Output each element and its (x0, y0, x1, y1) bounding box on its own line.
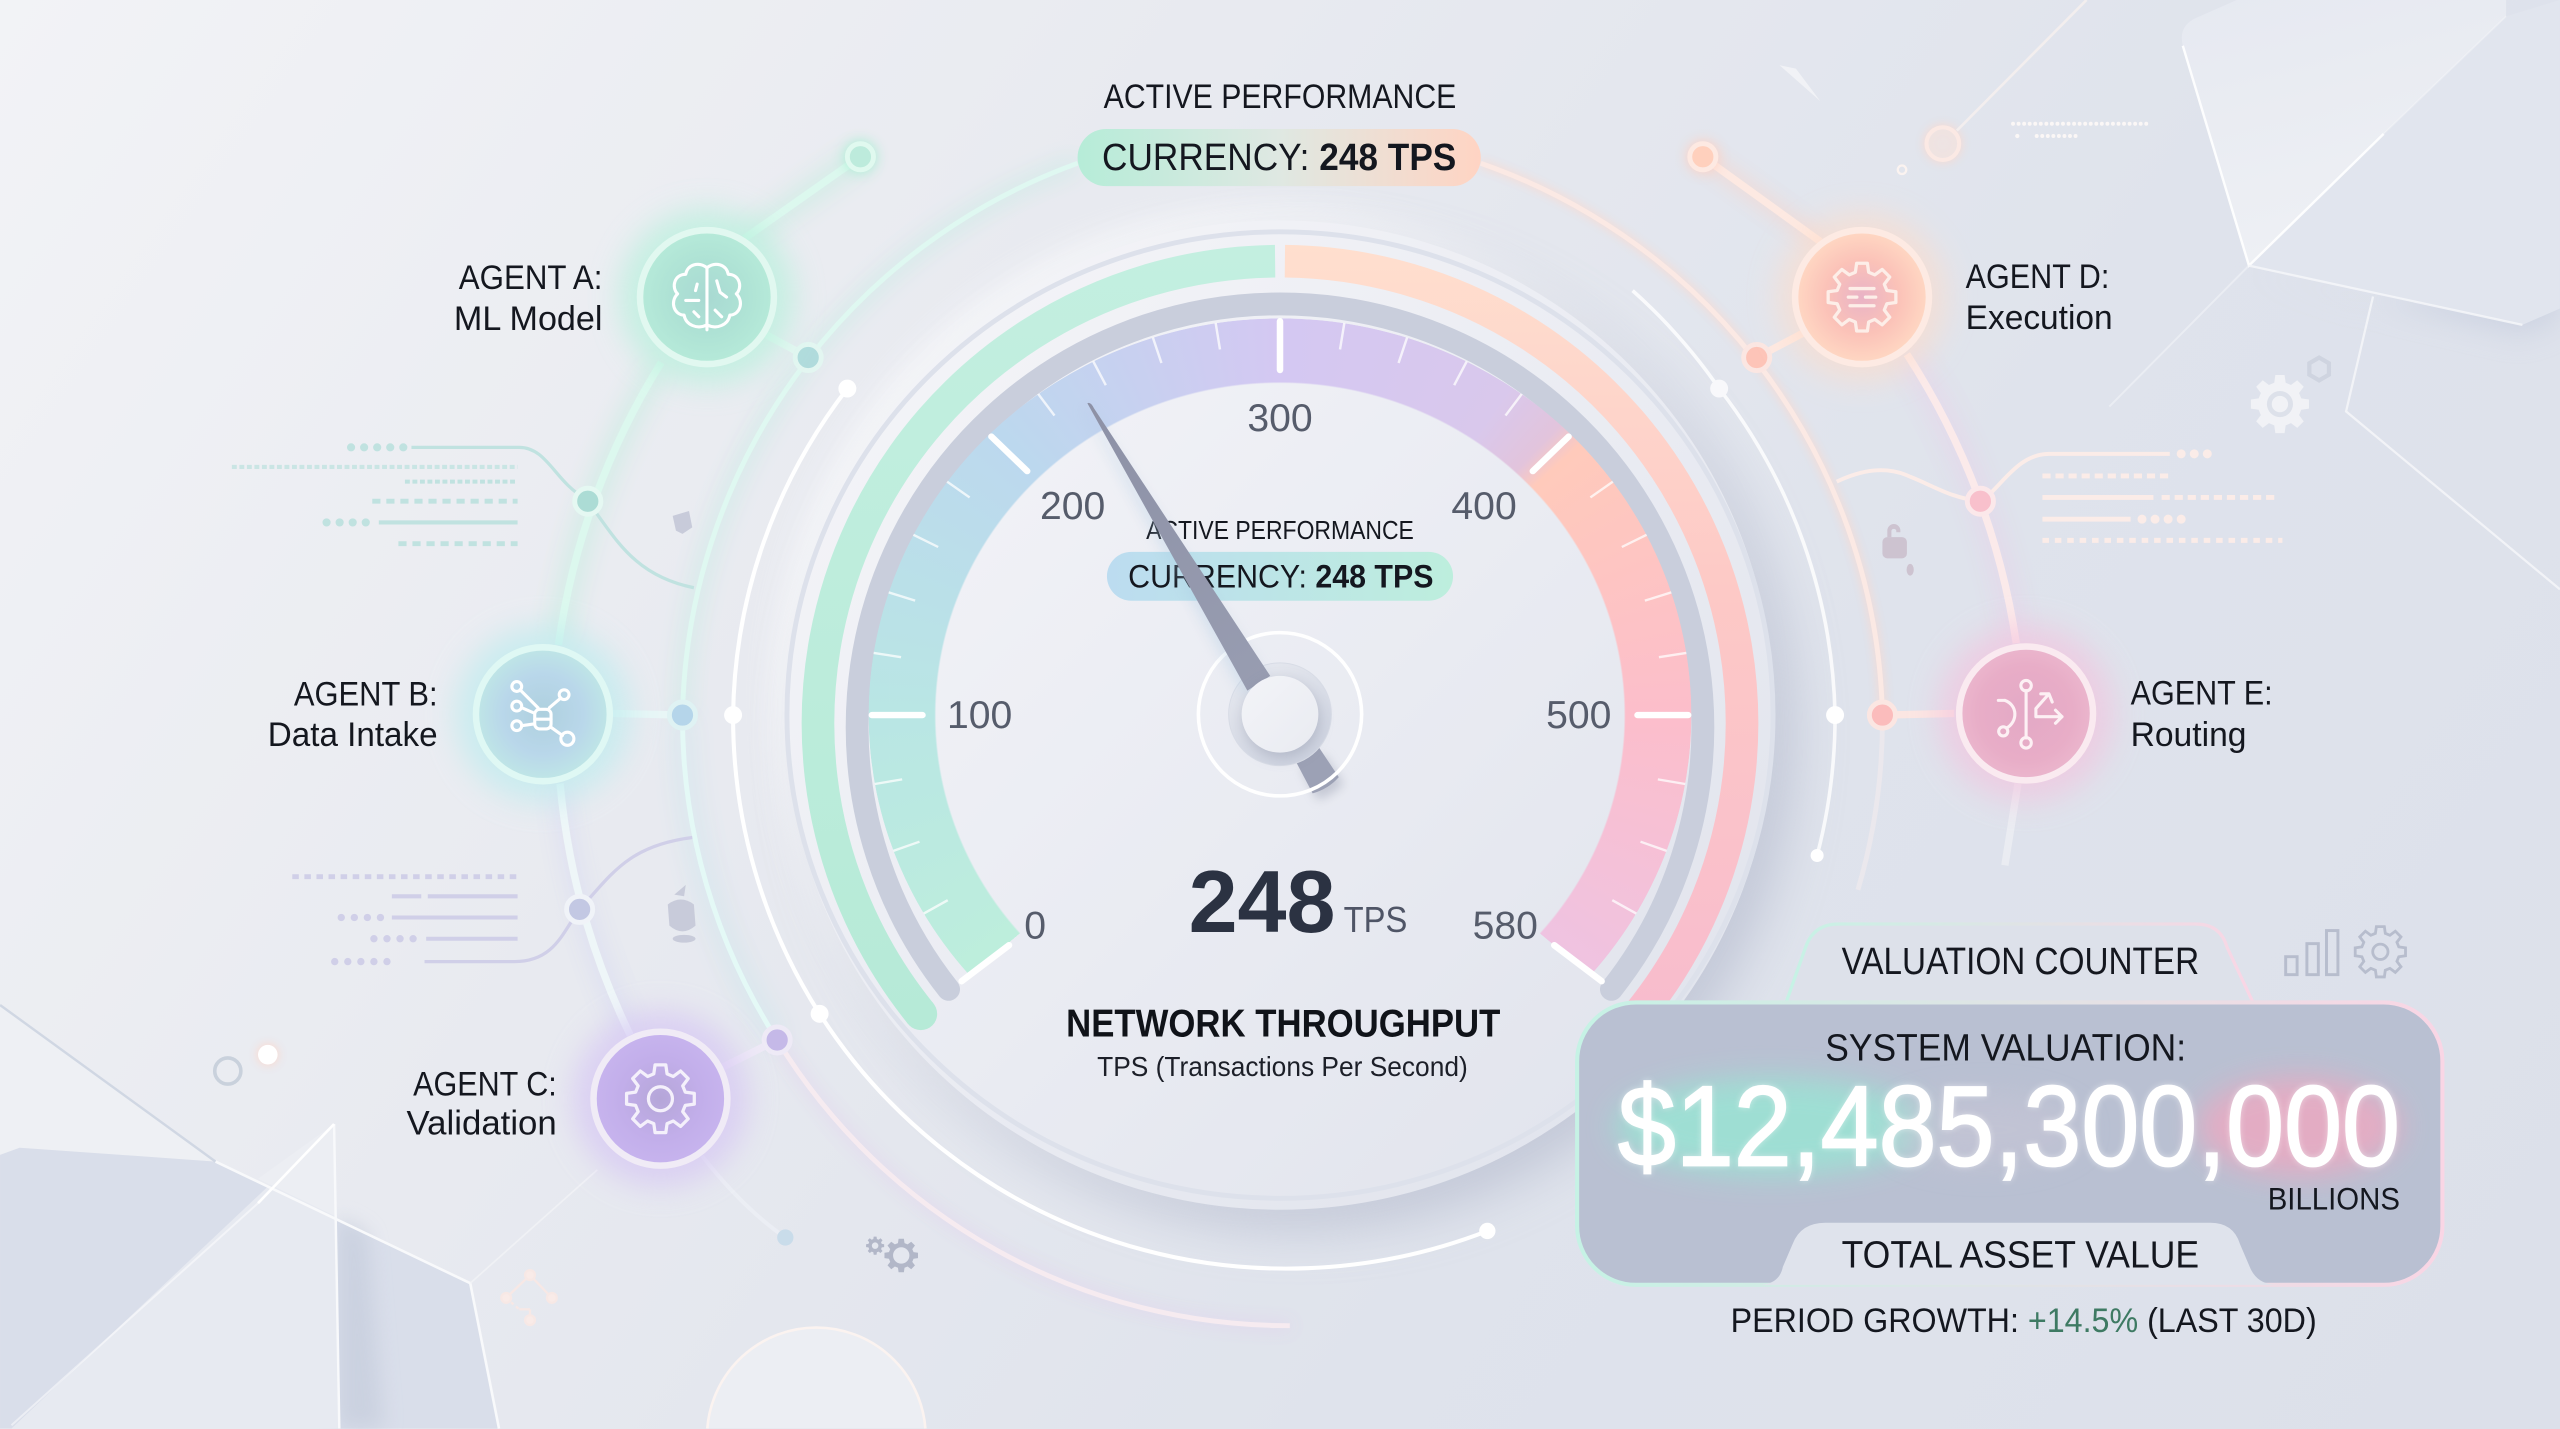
top performance label: ACTIVE PERFORMANCE (1104, 78, 1456, 116)
needle blade (1087, 403, 1270, 691)
agent E node (1938, 625, 2114, 802)
agent E label (2131, 674, 2273, 754)
inner currency pill: CURRENCY: 248 TPS (1128, 558, 1433, 595)
icon: small gears (866, 1237, 918, 1272)
hub knob (1242, 676, 1318, 753)
hub base (1229, 663, 1331, 766)
agent B node (455, 626, 631, 802)
period growth: PERIOD GROWTH: +14.5% (LAST 30D) (1731, 1302, 2317, 1340)
inner currency pill (1107, 552, 1453, 601)
icon: routing (1998, 680, 2062, 748)
big gauge disc (774, 209, 1793, 1228)
agent C label: Validation (407, 1105, 557, 1143)
outer peach-pink status arc (1285, 261, 1742, 1014)
background geometric shards bottom left (0, 1005, 597, 1429)
agent B label: AGENT B: (294, 675, 438, 713)
agent E label: Routing (2131, 716, 2246, 754)
grey inner track (857, 304, 1703, 989)
gauge subtitle: TPS (Transactions Per Second) (1097, 1051, 1468, 1082)
valuation panel (1577, 1002, 2442, 1285)
icon: execution gear (1828, 263, 1896, 331)
valuation tab (1786, 924, 2253, 1002)
valuation panel: $12,485,300,000 (1618, 1064, 2400, 1191)
faint floating shapes (668, 511, 696, 943)
total asset value tab: TOTAL ASSET VALUE (1842, 1234, 2199, 1276)
value glow (1615, 1078, 2400, 1175)
gauge scale labels: 500 (1546, 694, 1611, 737)
top currency pill (1078, 129, 1481, 186)
background geometric shards top right (1780, 0, 2560, 589)
throughput readout (1189, 852, 1407, 951)
decorative circle bottom (707, 1328, 925, 1429)
agent C label: AGENT C: (413, 1065, 557, 1103)
throughput readout: 248 (1189, 852, 1336, 951)
gauge scale labels: 200 (1040, 485, 1105, 528)
icon: white gear top right (2251, 358, 2329, 433)
gauge hub and needle (1087, 403, 1362, 796)
outer green status arc (818, 261, 1275, 1030)
agent B label (268, 675, 438, 754)
gauge end ticks (962, 945, 1602, 981)
icon: network faint (501, 1270, 557, 1325)
icon: data network (512, 682, 574, 745)
agent E label: AGENT E: (2131, 674, 2273, 712)
circuit traces left top (232, 447, 694, 588)
agent A node (619, 209, 795, 385)
valuation panel: BILLIONS (2268, 1182, 2400, 1217)
circuit traces left bottom (292, 838, 692, 962)
circuit traces right (1837, 454, 2282, 540)
decor top right (1898, 0, 2152, 174)
agent A label: ML Model (454, 300, 602, 338)
valuation tab: VALUATION COUNTER (1842, 940, 2199, 982)
gauge title: NETWORK THROUGHPUT (1066, 1003, 1500, 1046)
inner performance label: ACTIVE PERFORMANCE (1146, 515, 1414, 545)
gauge scale labels: 300 (1247, 397, 1313, 440)
total asset value tab (1762, 1223, 2274, 1285)
gauge ticks (872, 321, 1688, 914)
agent A label: AGENT A: (459, 259, 602, 297)
agent D label: Execution (1966, 299, 2113, 337)
agent D label: AGENT D: (1966, 258, 2109, 296)
agent C label (407, 1065, 557, 1143)
icon: lock (1882, 524, 1914, 576)
agent C node (572, 1011, 749, 1187)
gauge scale labels: 400 (1451, 485, 1517, 528)
gauge colour scale band (868, 318, 1692, 973)
gauge scale labels: 100 (947, 694, 1012, 737)
icon: gear (627, 1065, 694, 1133)
icon: bars and gear (2286, 927, 2406, 977)
agent D node (1777, 212, 1947, 382)
agent backbone curves (558, 157, 2018, 1237)
top currency pill: CURRENCY: 248 TPS (1102, 136, 1456, 178)
icon: brain (673, 264, 740, 330)
outer white orbit ring (724, 291, 1844, 1269)
agent A label (454, 259, 602, 338)
gauge scale labels: 0 (1024, 905, 1046, 948)
connector nodes (567, 144, 1993, 1246)
valuation panel: SYSTEM VALUATION: (1825, 1026, 2186, 1068)
agent D label (1966, 258, 2113, 337)
needle tail (1296, 748, 1339, 793)
gauge scale labels: 580 (1473, 905, 1538, 948)
connector ring (682, 163, 1882, 1326)
hub ring (1198, 633, 1362, 796)
small decor left (215, 1045, 278, 1084)
gauge scale labels (947, 397, 1611, 948)
throughput readout: TPS (1344, 899, 1407, 940)
agent B label: Data Intake (268, 716, 438, 754)
